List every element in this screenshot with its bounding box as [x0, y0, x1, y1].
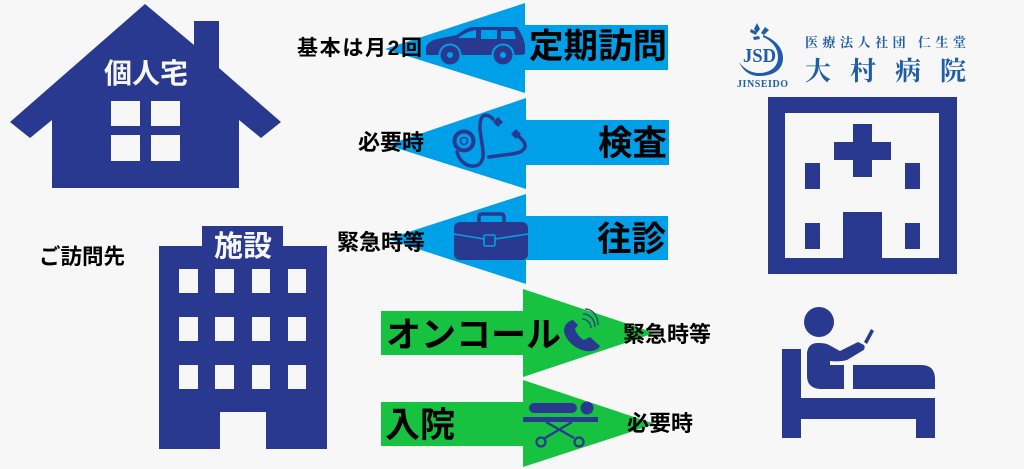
label: examination: 検査 [598, 125, 667, 163]
icon: car [426, 27, 525, 66]
arrow: regular visit [297, 3, 668, 93]
label: regular visit: 定期訪問 [529, 28, 667, 66]
label: twice monthly: 基本は月2回 [297, 37, 422, 60]
logo mark: JSD crescent and leaf [739, 23, 783, 76]
heading: visit destinations: ご訪問先 [39, 244, 125, 269]
logo text: JINSEIDO: JINSEIDO [737, 79, 788, 90]
logo mark: JSD crescent and leaf: JSD [743, 45, 776, 67]
logo text: medical corporation name: 医療法人社団 仁生堂 [805, 35, 966, 50]
label: hospitalization: 入院 [385, 406, 455, 445]
icon: stethoscope [454, 115, 525, 166]
logo: Omura Hospital [737, 23, 966, 90]
icon: stretcher [523, 402, 598, 446]
arrow: house call [337, 194, 668, 284]
label: private home: 個人宅 [104, 58, 188, 89]
arrow: hospitalization [381, 380, 693, 467]
label: on-call: オンコール [386, 316, 561, 355]
label: when needed: 必要時 [358, 130, 424, 155]
label: facility: 施設 [214, 230, 272, 263]
label: emergency etc.: 緊急時等 [623, 322, 711, 347]
arrow: on-call [381, 289, 711, 377]
icon: phone with signal [564, 309, 600, 351]
logo text: hospital name: 大村病院 [805, 57, 966, 86]
icon: briefcase [454, 214, 528, 260]
icon: patient in bed [782, 307, 935, 438]
label: emergency etc.: 緊急時等 [337, 230, 425, 255]
icon: care facility building [159, 226, 327, 449]
arrow: examination [358, 98, 669, 189]
icon: private house [10, 4, 281, 188]
icon: hospital [768, 97, 957, 274]
label: when needed: 必要時 [627, 411, 693, 436]
label: house call: 往診 [597, 221, 666, 259]
